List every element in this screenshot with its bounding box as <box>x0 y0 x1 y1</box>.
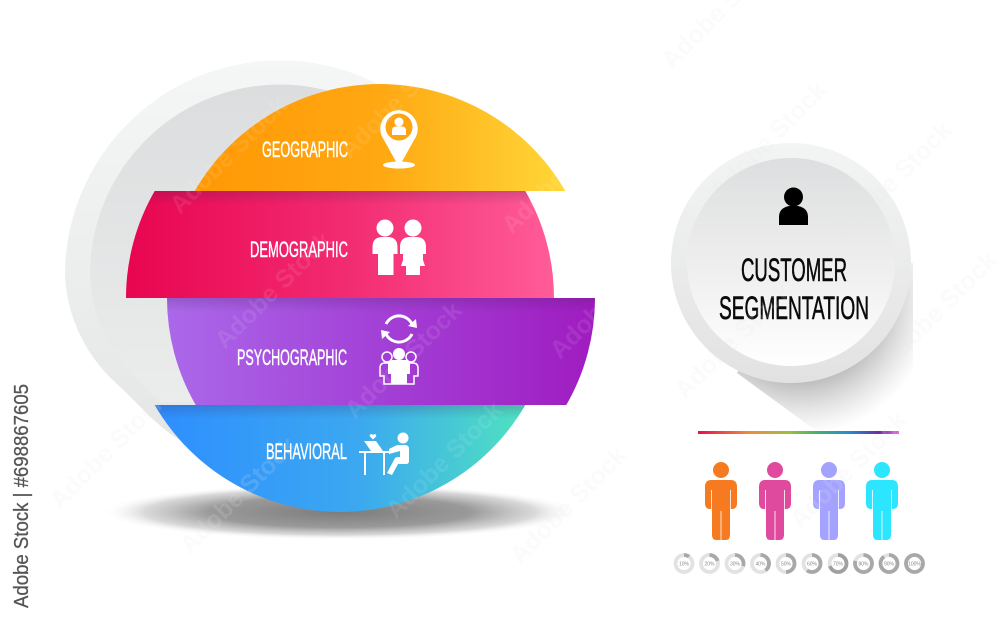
ring 100%: 100% <box>908 561 921 567</box>
ring 50%: 50% <box>781 561 792 567</box>
watermarks: Adobe Stock <box>704 76 832 204</box>
person: lavender <box>813 462 845 540</box>
band shape <box>126 191 554 298</box>
ring 60%: 60% <box>807 561 818 567</box>
ring 50% <box>778 555 794 572</box>
ring 40%: 40% <box>755 561 766 567</box>
title text <box>719 252 869 326</box>
watermarks: Adobe Stock <box>874 246 1000 374</box>
person: cyan <box>866 462 898 540</box>
watermarks: Adobe Stock <box>829 116 957 244</box>
people row <box>705 462 898 540</box>
ring 10% <box>676 555 692 572</box>
band shape <box>195 84 565 191</box>
person: pink <box>759 462 791 540</box>
ring 20%: 20% <box>704 561 715 567</box>
ring 10%: 10% <box>679 561 690 567</box>
stock id vertical text: Adobe Stock | #698867605 <box>11 384 33 608</box>
watermarks: Adobe Stock <box>380 396 508 524</box>
ring 90% <box>880 555 898 572</box>
icon: person at desk with laptop <box>359 432 409 475</box>
ring 70% <box>830 555 846 572</box>
watermarks: Adobe Stock <box>496 111 624 239</box>
watermarks: Adobe Stock <box>174 431 302 559</box>
percentage rings <box>676 555 923 572</box>
watermarks: Adobe Stock <box>784 406 912 534</box>
ring 100% <box>906 555 923 572</box>
icon: man and woman <box>372 220 426 275</box>
title circle <box>671 143 911 383</box>
background circle: outer light disc <box>65 60 400 440</box>
label: geographic: GEOGRAPHIC <box>262 137 348 162</box>
watermarks: Adobe Stock <box>504 441 632 569</box>
label: demographic: DEMOGRAPHIC <box>250 237 348 262</box>
ring 20% <box>701 555 718 572</box>
background circle: inner grey disc <box>90 85 345 405</box>
person: orange <box>705 462 737 540</box>
rainbow divider <box>698 431 899 434</box>
label: psychographic: PSYCHOGRAPHIC <box>237 345 347 370</box>
watermarks: Adobe Stock <box>44 386 172 514</box>
title text: CUSTOMER <box>741 252 847 288</box>
ring 70%: 70% <box>833 561 844 567</box>
ring 90%: 90% <box>884 561 895 567</box>
segment: demographic <box>126 191 554 298</box>
watermarks: Adobe Stock <box>334 36 462 164</box>
watermarks: Adobe Stock <box>209 226 337 354</box>
segment: geographic <box>195 84 565 191</box>
segment: psychographic <box>167 298 595 405</box>
ring 40% <box>752 555 769 572</box>
inner disc <box>687 158 895 366</box>
icon: person <box>779 188 808 225</box>
icon: cycle arrows <box>381 316 417 342</box>
ring 30% <box>726 555 744 572</box>
outer ring <box>671 143 911 383</box>
band shape <box>167 298 595 405</box>
ring 80%: 80% <box>858 561 869 567</box>
ring 30%: 30% <box>730 561 741 567</box>
title text: SEGMENTATION <box>719 290 869 326</box>
watermarks: Adobe Stock <box>544 236 672 364</box>
long shadow of title circle <box>737 263 913 430</box>
segment: behavioral <box>155 405 525 512</box>
watermarks: Adobe Stock <box>669 276 797 404</box>
icon: group of people <box>380 348 418 384</box>
watermarks: Adobe Stock <box>164 91 292 219</box>
label: behavioral: BEHAVIORAL <box>266 439 347 464</box>
icon: location pin with person <box>380 110 418 168</box>
band shape <box>155 405 525 512</box>
ring 60% <box>804 555 820 572</box>
ground shadow <box>102 484 578 540</box>
ring 80% <box>855 555 872 572</box>
watermarks: Adobe Stock <box>339 296 467 424</box>
